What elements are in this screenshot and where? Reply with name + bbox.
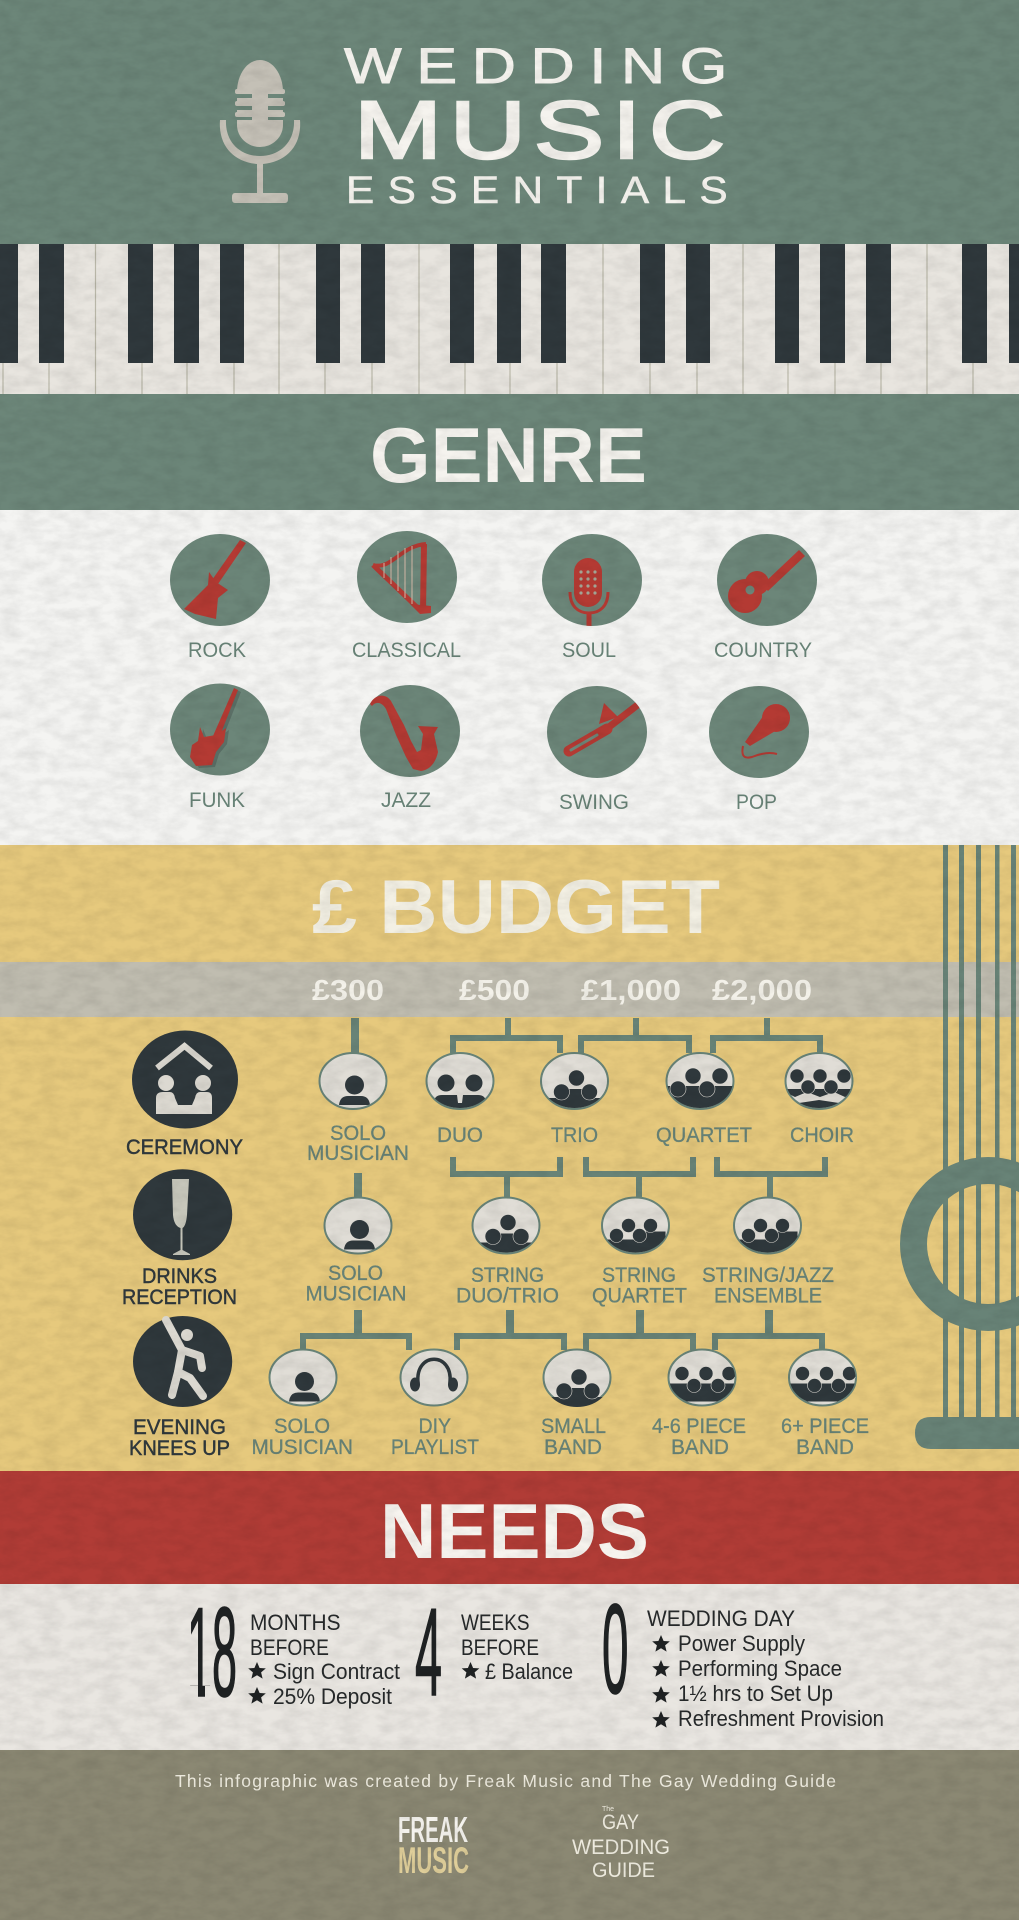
heading: needs: NEEDS xyxy=(380,1487,649,1575)
heading: budget: £ BUDGET xyxy=(312,865,720,950)
item: 4 weeks before xyxy=(415,1584,573,1722)
genre: country xyxy=(714,534,817,662)
row: evening knees up xyxy=(129,1316,869,1460)
label: FUNK xyxy=(189,789,245,812)
guitar graphic xyxy=(914,845,1019,1449)
logo: freak music xyxy=(398,1809,469,1881)
row: evening knees up: KNEES UP xyxy=(129,1437,230,1460)
logo: the gay wedding guide: GAY xyxy=(602,1811,639,1834)
item: 4 weeks before: 4 xyxy=(415,1584,442,1722)
price scale: £1,000 xyxy=(581,975,681,1007)
option: diy playlist: PLAYLIST xyxy=(391,1436,479,1459)
panel: budget xyxy=(0,845,1019,1471)
option: trio: TRIO xyxy=(551,1124,598,1147)
option: solo musician: MUSICIAN xyxy=(306,1282,406,1306)
genre: jazz xyxy=(360,685,460,812)
row: drinks reception: RECEPTION xyxy=(122,1286,237,1309)
logo: the gay wedding guide: WEDDING xyxy=(572,1836,670,1859)
option: duo: DUO xyxy=(437,1124,483,1147)
label: ROCK xyxy=(188,639,246,662)
item: 18 months before: Sign Contract xyxy=(273,1659,400,1684)
item: 0 wedding day xyxy=(602,1578,884,1731)
label: evening knees up: EVENING xyxy=(133,1416,226,1439)
connectors xyxy=(303,1018,825,1350)
item: 0 wedding day: 0 xyxy=(602,1578,628,1720)
option: solo musician: SOLO xyxy=(330,1122,386,1145)
option: diy playlist xyxy=(391,1350,479,1459)
item: 4 weeks before: £ Balance xyxy=(485,1659,573,1684)
option: 6+ piece band: BAND xyxy=(796,1436,854,1459)
option: string quartet xyxy=(592,1198,687,1308)
price scale: £300 xyxy=(312,975,384,1007)
price scale: £500 xyxy=(459,975,530,1007)
option: 6+ piece band xyxy=(781,1350,869,1459)
item: 0 wedding day: 1½ hrs to Set Up xyxy=(678,1681,833,1706)
label: ceremony: CEREMONY xyxy=(126,1136,243,1159)
option: 4-6 piece band: BAND xyxy=(671,1436,729,1459)
label: SWING xyxy=(559,791,629,814)
title: MUSIC xyxy=(354,85,733,176)
option: string duo/trio: DUO/TRIO xyxy=(456,1284,559,1308)
title: WEDDING xyxy=(344,38,742,94)
option: solo musician: SOLO xyxy=(328,1262,383,1285)
option: string duo/trio: STRING xyxy=(471,1264,544,1287)
label: CLASSICAL xyxy=(352,639,461,662)
logo: the gay wedding guide: GUIDE xyxy=(592,1859,655,1882)
option: 4-6 piece band xyxy=(652,1350,746,1459)
option: string quartet: QUARTET xyxy=(592,1284,687,1308)
label: COUNTRY xyxy=(714,639,812,662)
item: 0 wedding day: WEDDING DAY xyxy=(647,1606,795,1631)
option: duo xyxy=(426,1053,494,1147)
genre: pop xyxy=(709,686,809,814)
logo: the gay wedding guide xyxy=(572,1806,670,1882)
logo: freak music: MUSIC xyxy=(398,1840,469,1881)
label: JAZZ xyxy=(381,789,431,812)
logo: the gay wedding guide: The xyxy=(602,1806,614,1813)
item: 4 weeks before: WEEKS xyxy=(461,1610,530,1635)
genre: classical xyxy=(352,531,461,662)
icon: champagne flute xyxy=(133,1169,232,1260)
option: quartet xyxy=(656,1053,752,1147)
icon: dancer xyxy=(133,1316,232,1407)
option: small band: SMALL xyxy=(541,1415,606,1438)
panel: needs timeline xyxy=(0,1578,1019,1750)
piano keyboard xyxy=(0,244,1019,394)
title: ESSENTIALS xyxy=(346,170,741,212)
item: 18 months before: 25% Deposit xyxy=(273,1684,392,1709)
item: 4 weeks before: BEFORE xyxy=(461,1635,539,1660)
option: choir: CHOIR xyxy=(790,1124,854,1147)
item: 0 wedding day: Refreshment Provision xyxy=(678,1706,884,1731)
option: string/jazz ensemble xyxy=(702,1198,834,1308)
option: solo musician: SOLO xyxy=(274,1415,330,1438)
panel: genres xyxy=(0,510,1019,845)
item: 0 wedding day: Power Supply xyxy=(678,1631,805,1656)
item: 18 months before: 18 xyxy=(187,1581,237,1723)
genre: swing xyxy=(547,686,647,814)
option: 6+ piece band: 6+ PIECE xyxy=(781,1415,869,1438)
option: diy playlist: DIY xyxy=(418,1415,451,1438)
option: solo musician: MUSICIAN xyxy=(252,1436,353,1459)
row: ceremony xyxy=(126,1030,854,1165)
option: string duo/trio xyxy=(456,1198,559,1308)
panel: needs header xyxy=(0,1471,1019,1584)
option: small band: BAND xyxy=(544,1436,602,1459)
price scale: £2,000 xyxy=(712,975,812,1007)
option: 4-6 piece band: 4-6 PIECE xyxy=(652,1415,746,1438)
item: 18 months before xyxy=(187,1581,400,1723)
genre: funk xyxy=(170,684,270,812)
title xyxy=(344,38,742,212)
label: SOUL xyxy=(562,639,616,662)
option: string/jazz ensemble: STRING/JAZZ xyxy=(702,1264,834,1287)
option: quartet: QUARTET xyxy=(656,1124,752,1147)
header panel xyxy=(0,0,1019,244)
label: drinks reception: DRINKS xyxy=(142,1265,217,1288)
panel: footer xyxy=(0,1750,1019,1920)
item: 18 months before: MONTHS xyxy=(250,1610,340,1635)
price scale xyxy=(312,975,812,1007)
credit line: This infographic was created by Freak Music and The Gay Wedding Guide xyxy=(175,1771,836,1791)
option: choir xyxy=(785,1053,854,1147)
option: solo musician xyxy=(307,1053,409,1165)
option: solo musician xyxy=(252,1350,353,1459)
genre: rock xyxy=(170,534,270,662)
option: solo musician xyxy=(306,1198,406,1306)
row: drinks reception xyxy=(122,1169,834,1309)
label: POP xyxy=(736,791,777,814)
icon: ceremony xyxy=(132,1030,238,1128)
logo: freak music: FREAK xyxy=(398,1809,468,1850)
heading: genre: GENRE xyxy=(370,411,647,499)
panel: genre header xyxy=(0,394,1019,510)
item: 18 months before: BEFORE xyxy=(250,1635,329,1660)
item: 0 wedding day: Performing Space xyxy=(678,1656,842,1681)
icon: microphone xyxy=(220,60,300,203)
option: solo musician: MUSICIAN xyxy=(307,1142,409,1165)
option: string/jazz ensemble: ENSEMBLE xyxy=(714,1284,822,1308)
option: small band xyxy=(541,1350,610,1459)
genre: soul xyxy=(542,534,642,662)
option: string quartet: STRING xyxy=(602,1264,676,1287)
option: trio xyxy=(541,1053,608,1147)
